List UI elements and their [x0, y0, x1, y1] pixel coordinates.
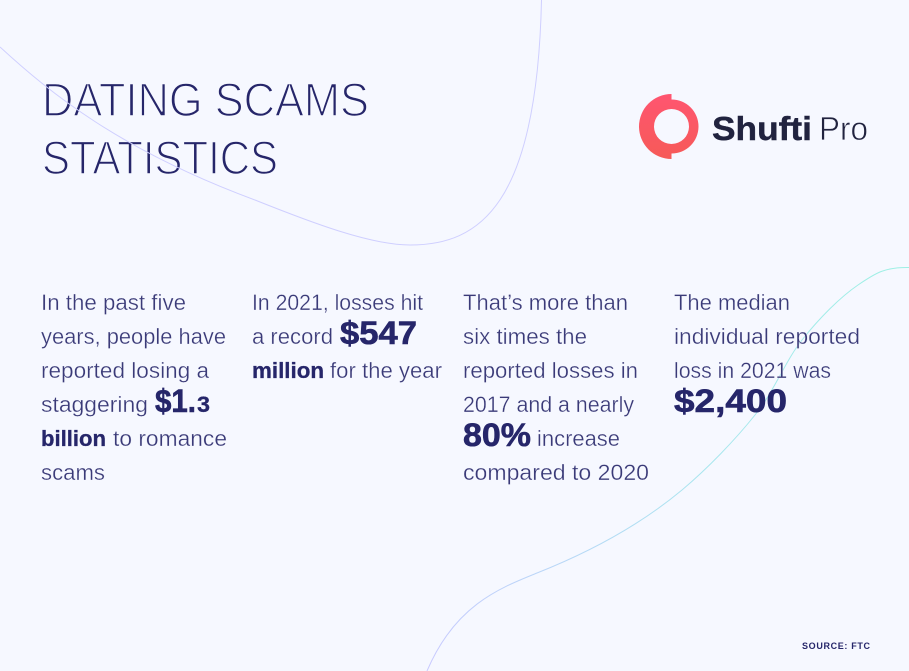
text block: column 4	[674, 290, 860, 419]
logo wordmark	[712, 110, 868, 147]
source note: SOURCE: FTC	[802, 641, 870, 651]
text block: column 1: scams	[41, 460, 105, 485]
text block: column 1: staggering	[41, 392, 148, 417]
text block: column 3: increase	[537, 426, 620, 451]
text block: column 1: years, people have	[41, 324, 226, 349]
text block: column 3	[463, 290, 649, 485]
text block: column 2: for the year	[330, 358, 442, 383]
text block: column 3: compared to 2020	[463, 460, 649, 485]
text block: column 1: to romance	[113, 426, 227, 451]
icon: logo ring	[639, 94, 698, 159]
text block: column 4: individual reported	[674, 324, 860, 349]
decorative curve: purple top	[0, 0, 542, 245]
title	[42, 73, 369, 184]
text block: column 2: $547	[340, 315, 417, 351]
text block: column 3: That’s more than	[463, 290, 628, 315]
text block: column 2: a record	[252, 324, 333, 349]
text block: column 3: six times the	[463, 324, 587, 349]
decorative curve: teal bottom	[427, 267, 909, 671]
text block: column 1: reported losing a	[41, 358, 210, 383]
title: DATING SCAMS	[42, 73, 369, 126]
text block: column 1: $1.	[155, 383, 196, 419]
text block: column 3: 80%	[463, 417, 531, 453]
text block: column 2: In 2021, losses hit	[252, 290, 423, 315]
text block: column 1	[41, 290, 227, 485]
text block: column 3: 2017 and a nearly	[463, 392, 634, 417]
text block: column 2	[252, 290, 442, 383]
text block: column 4: $2,400	[674, 383, 787, 419]
text block: column 1: 3	[197, 392, 210, 417]
logo wordmark: Shufti	[712, 110, 812, 147]
text block: column 1: billion	[41, 426, 106, 451]
title: STATISTICS	[42, 131, 278, 184]
text block: column 3: reported losses in	[463, 358, 638, 383]
text block: column 2: million	[252, 358, 324, 383]
logo: Shufti Pro	[639, 94, 868, 159]
text block: column 1: In the past five	[41, 290, 186, 315]
logo wordmark: Pro	[819, 110, 868, 147]
text block: column 4: loss in 2021 was	[674, 358, 831, 383]
text block: column 4: The median	[674, 290, 790, 315]
